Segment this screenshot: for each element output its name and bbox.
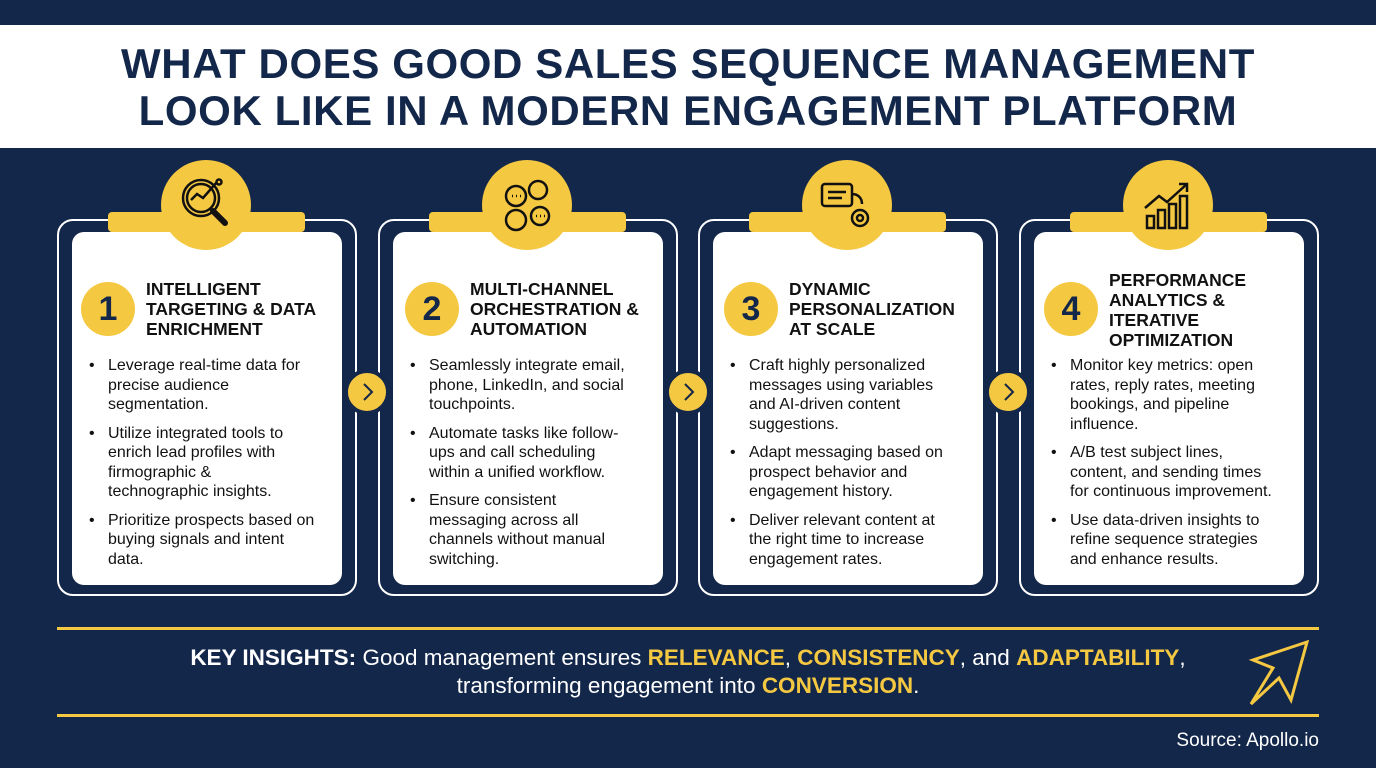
bullets [730, 357, 943, 568]
bullets [410, 357, 625, 568]
source: Source: Apollo.io [1176, 730, 1319, 751]
bullets: Use data-driven insights to refine sequence strategies and enhance results. [1070, 512, 1259, 568]
arrow 3 [985, 369, 1031, 415]
panel: card 2 [378, 160, 678, 596]
title: WHAT DOES GOOD SALES SEQUENCE MANAGEMENT [121, 40, 1255, 87]
heading: DYNAMIC PERSONALIZATION AT SCALE [789, 279, 955, 339]
bullets: Seamlessly integrate email, phone, LinkedIn, and social touchpoints. [429, 357, 625, 413]
number 4: 4 [1062, 290, 1080, 328]
number 3: 3 [742, 290, 760, 328]
arrow 2 [665, 369, 711, 415]
bullets: Prioritize prospects based on buying signals and intent data. [108, 512, 314, 568]
icon: message gear [802, 160, 892, 250]
icon: magnifier chart [161, 160, 251, 250]
icon: chat channels [482, 160, 572, 250]
number 3 [724, 282, 778, 336]
icon: growth bars [1123, 160, 1213, 250]
icon: cursor arrow [1248, 640, 1310, 706]
panel: card 1 [57, 160, 357, 596]
bullets: Ensure consistent messaging across all channels without manual switching. [429, 492, 605, 568]
title [0, 25, 1376, 148]
bullets: Adapt messaging based on prospect behavior and engagement history. [749, 444, 943, 500]
bullets: Craft highly personalized messages using variables and AI-driven content suggestions. [749, 357, 933, 432]
arrow 1 [344, 369, 390, 415]
bullets: Monitor key metrics: open rates, reply rates, meeting bookings, and pipeline influence. [1070, 357, 1255, 432]
key insights text [190, 645, 1186, 698]
number 2 [405, 282, 459, 336]
heading: PERFORMANCE ANALYTICS & ITERATIVE OPTIMIZATION [1109, 270, 1246, 350]
bullets: A/B test subject lines, content, and sending times for continuous improvement. [1070, 444, 1272, 500]
bullets: Deliver relevant content at the right time to increase engagement rates. [749, 512, 935, 568]
number 1 [81, 282, 135, 336]
title: LOOK LIKE IN A MODERN ENGAGEMENT PLATFORM [139, 87, 1237, 134]
bullets: Utilize integrated tools to enrich lead profiles with firmographic & technographic insights. [108, 424, 283, 500]
key insights text: KEY INSIGHTS: Good management ensures RELEVANCE, CONSISTENCY, and ADAPTABILITY, [190, 645, 1186, 670]
bullets [90, 357, 314, 568]
heading: MULTI-CHANNEL ORCHESTRATION & AUTOMATION [470, 279, 639, 339]
number 1: 1 [99, 290, 117, 328]
panel: card 4 [1019, 160, 1319, 596]
number 2: 2 [423, 290, 441, 328]
number 4 [1044, 282, 1098, 336]
key insights text: transforming engagement into CONVERSION. [457, 673, 919, 698]
bullets [1052, 357, 1272, 568]
bullets: Automate tasks like follow-ups and call scheduling within a unified workflow. [429, 424, 618, 480]
heading: INTELLIGENT TARGETING & DATA ENRICHMENT [146, 279, 315, 339]
bullets: Leverage real-time data for precise audience segmentation. [108, 357, 300, 413]
panel: card 3 [698, 160, 998, 596]
